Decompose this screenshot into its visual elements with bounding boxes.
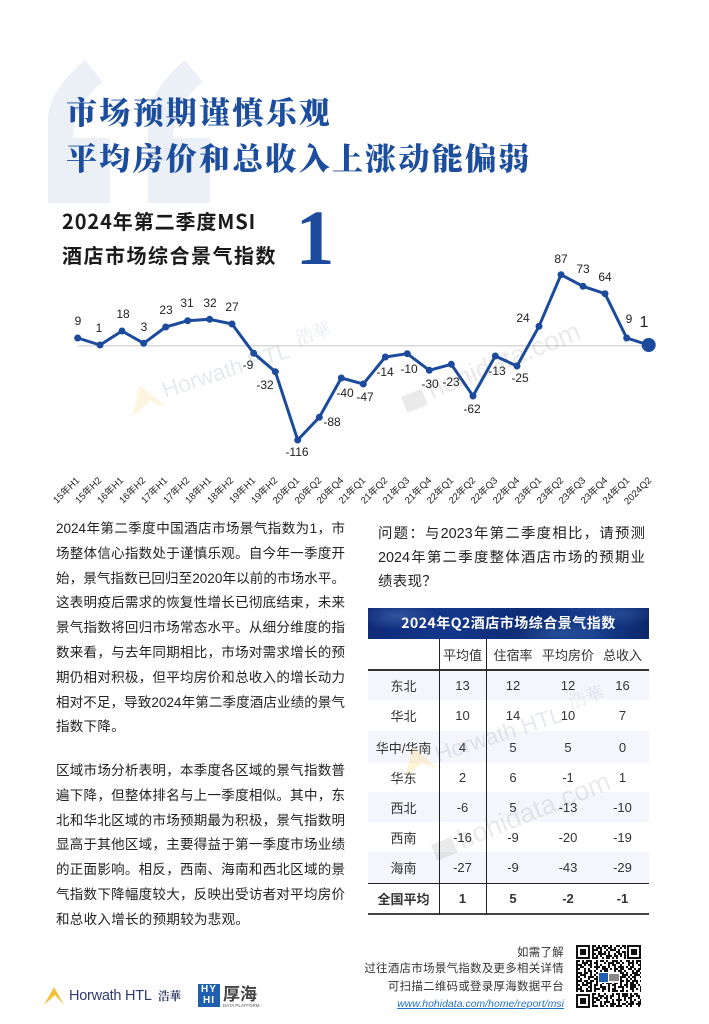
- line chart: MSI index history: -47: [356, 390, 374, 404]
- data table: regional index: -29: [613, 860, 632, 875]
- data table: regional index: 平均值: [443, 648, 482, 663]
- data table: regional index: -20: [559, 830, 577, 844]
- line chart: MSI index history: -9: [243, 358, 254, 372]
- data table: regional index: -1: [617, 891, 628, 906]
- data table: regional index: -10: [613, 800, 632, 814]
- footer call to action: 如需了解: [517, 947, 564, 959]
- title: 平均房价和总收入上涨动能偏弱: [66, 142, 532, 177]
- data table: regional index: 5: [509, 800, 517, 814]
- logo: HOHI data platform: HY: [201, 984, 217, 995]
- line chart: MSI index history: 20年Q1: [270, 475, 302, 507]
- line chart: MSI index history: 24: [516, 311, 530, 325]
- text block: national summary: 指数下降。: [56, 719, 125, 734]
- data table: regional index: 0: [619, 740, 626, 754]
- data table: regional index: 7: [619, 708, 626, 723]
- watermarks: 浩華: [292, 315, 334, 351]
- data table: regional index: 平均房价: [542, 648, 594, 663]
- data table: regional index: -43: [559, 860, 577, 875]
- text block: regional analysis: 的正面影响。相反，西南、海南和西北区域的景: [56, 862, 345, 877]
- line chart: MSI index history: 18年H2: [205, 475, 236, 506]
- title: 市场预期谨慎乐观: [66, 96, 332, 131]
- data table: regional index: 西南: [390, 830, 416, 846]
- text block: national summary: 这表明疫后需求的恢复性增长已彻底结束，未来: [56, 595, 345, 610]
- watermarks: hohidata.com: [423, 316, 585, 405]
- text block: national summary: 2024年第二季度中国酒店市场景气指数为1，市: [56, 521, 345, 536]
- data table: regional index: 东北: [390, 678, 416, 694]
- line chart: MSI index history: 22年Q4: [490, 474, 523, 507]
- line chart: MSI index history: 22年Q3: [468, 475, 500, 507]
- data table: regional index: 海南: [390, 861, 416, 876]
- data table: regional index: -19: [613, 830, 632, 844]
- line chart: MSI index history: 18: [116, 307, 130, 321]
- footer call to action: 可扫描二维码或登录厚海数据平台: [388, 981, 564, 993]
- line chart: MSI index history: -14: [376, 365, 394, 379]
- survey question: [378, 526, 645, 590]
- line chart: MSI index history: -116: [285, 445, 309, 459]
- text block: national summary: 期仍相对积极，但平均房价和总收入的增长动力: [56, 670, 345, 685]
- text block: regional analysis: 北和华北区域的市场预期最为积极，景气指数明: [56, 813, 345, 828]
- line chart: MSI index history: 73: [576, 262, 590, 276]
- line chart: MSI index history: 32: [203, 296, 217, 310]
- line chart: MSI index history: -30: [421, 377, 439, 391]
- data table: regional index: 1: [459, 891, 466, 906]
- data table: regional index: -16: [453, 830, 472, 844]
- text block: national summary: 相对不足，导致2024年第二季度酒店业绩的景气: [56, 695, 345, 710]
- data table: regional index: 2: [459, 770, 466, 785]
- data table: regional index: 5: [509, 891, 517, 906]
- line chart: MSI index history: 87: [554, 252, 568, 266]
- data table: regional index: 华北: [390, 709, 416, 724]
- subtitle: MSI index name: [62, 206, 277, 269]
- line chart: MSI index history: 9: [75, 314, 82, 328]
- line chart: MSI index history: -32: [256, 378, 274, 392]
- logo: Horwath HTL: Horwath HTL: [69, 988, 152, 1004]
- line chart: MSI index history: -25: [511, 371, 529, 385]
- data table: regional index: 西北: [390, 800, 416, 816]
- data table: regional index: -27: [453, 860, 472, 875]
- line chart: MSI index history: [51, 252, 656, 507]
- line chart: MSI index history: -62: [463, 402, 481, 416]
- line chart: MSI index history: 9: [626, 312, 633, 326]
- watermarks: 浩華: [565, 679, 607, 715]
- data table: regional index: 12: [561, 678, 575, 692]
- logo: HOHI data platform: DATA PLATFORM: [223, 1003, 260, 1008]
- line chart: MSI index history: 21年Q2: [358, 475, 390, 507]
- logo: HOHI data platform: HI: [203, 995, 215, 1006]
- line chart: MSI index history: 1: [640, 314, 649, 331]
- data table: regional index: -13: [559, 800, 577, 814]
- line chart: MSI index history: 23: [159, 303, 173, 317]
- logo: HOHI data platform: [198, 980, 260, 1008]
- footer call to action: www.hohidata.com/home/report/msi: [397, 999, 564, 1010]
- data table: regional index: 12: [506, 678, 520, 692]
- line chart: MSI index history: 31: [180, 296, 194, 310]
- data table: regional index: 10: [455, 708, 470, 723]
- data table: regional index: 10: [561, 708, 575, 723]
- data table: regional index: 4: [459, 740, 466, 754]
- text block: regional analysis: 和总收入增长的预期较为悲观。: [56, 912, 249, 927]
- line chart: MSI index history: 21年Q3: [380, 475, 412, 507]
- table header banner: 2024年Q2酒店市场综合景气指数: [401, 613, 616, 633]
- line chart: MSI index history: 15年H2: [73, 475, 104, 506]
- text block: regional analysis: 遍下降，但整体排名与上一季度相似。其中，东: [56, 788, 345, 803]
- line chart: MSI index history: 19年H2: [249, 475, 280, 506]
- line chart: MSI index history: 17年H1: [139, 475, 170, 506]
- text block: national summary: [56, 521, 345, 734]
- data table: regional index: 5: [509, 740, 517, 754]
- data table: regional index: -1: [562, 770, 574, 785]
- line chart: MSI index history: 21年Q1: [336, 475, 368, 507]
- line chart: MSI index history: 22年Q2: [446, 475, 478, 507]
- line chart: MSI index history: 21年Q4: [402, 474, 435, 507]
- line chart: MSI index history: 15年H1: [51, 475, 82, 506]
- data table: regional index: 13: [455, 678, 470, 692]
- line chart: MSI index history: 20年Q2: [292, 475, 324, 507]
- data table: regional index: -6: [457, 800, 468, 814]
- line chart: MSI index history: -40: [336, 386, 354, 400]
- line chart: MSI index history: 17年H2: [161, 475, 192, 506]
- data table: regional index: 16: [615, 678, 630, 692]
- line chart: MSI index history: 16年H2: [117, 475, 148, 506]
- line chart: MSI index history: 2024Q2: [622, 475, 654, 507]
- watermarks: hohidata.com: [453, 766, 615, 855]
- data table: regional index: 华东: [390, 771, 416, 786]
- line chart: MSI index history: 16年H1: [95, 475, 126, 506]
- data table: regional index: 6: [509, 770, 517, 785]
- data table: regional index: 住宿率: [493, 648, 532, 663]
- text block: national summary: 始，景气指数已回归至2020年以前的市场水平。: [56, 571, 345, 586]
- subtitle: MSI index name: 2024年第二季度MSI: [62, 206, 256, 235]
- line chart: MSI index history: 22年Q1: [424, 475, 456, 507]
- survey question: 绩表现？: [378, 574, 437, 590]
- watermarks: Horwath HTL: [159, 338, 293, 403]
- data table: regional index: [368, 639, 649, 915]
- logo: Horwath HTL: [44, 987, 181, 1005]
- icon: QR code: [576, 945, 641, 1008]
- data table: regional index: 5: [564, 740, 572, 754]
- watermarks: Horwath HTL: [432, 702, 566, 767]
- line chart: MSI index history: -23: [442, 375, 460, 389]
- text block: national summary: 场整体信心指数处于谨慎乐观。自今年一季度开: [56, 546, 345, 561]
- line chart: MSI index history: 18年H1: [183, 475, 214, 506]
- line chart: MSI index history: 23年Q1: [512, 475, 544, 507]
- logo: HOHI data platform: 厚海: [223, 980, 257, 1005]
- text block: regional analysis: [56, 763, 345, 927]
- line chart: MSI index history: 24年Q1: [600, 475, 632, 507]
- decorative quotation mark: [48, 60, 210, 203]
- data table: regional index: 总收入: [603, 648, 642, 663]
- text block: regional analysis: 区域市场分析表明，本季度各区域的景气指数普: [56, 763, 345, 778]
- line chart: MSI index history: 3: [141, 320, 148, 334]
- footer call to action: [364, 946, 564, 1010]
- line chart: MSI index history: 23年Q2: [534, 475, 566, 507]
- line chart: MSI index history: 23年Q4: [578, 474, 611, 507]
- title: [66, 96, 532, 177]
- data table: regional index: -9: [507, 830, 519, 844]
- line chart: MSI index history: -13: [488, 364, 506, 378]
- data table: regional index: 1: [619, 770, 626, 785]
- line chart: MSI index history: 27: [225, 300, 239, 314]
- text block: national summary: 数来看，与去年同期相比，市场对需求增长的预: [56, 645, 345, 660]
- line chart: MSI index history: 20年Q4: [314, 474, 347, 507]
- logo: Horwath HTL: 浩華: [158, 988, 181, 1004]
- survey question: 问题：与2023年第二季度相比，请预测: [378, 526, 645, 542]
- data table: regional index: 华中/华南: [376, 740, 431, 756]
- survey question: 2024年第二季度整体酒店市场的预期业: [378, 550, 645, 566]
- data table: regional index: -9: [507, 860, 519, 875]
- line chart: MSI index history: 64: [598, 270, 612, 284]
- subtitle: MSI index name: 酒店市场综合景气指数: [62, 240, 277, 269]
- headline index value: 1: [296, 194, 334, 281]
- text block: regional analysis: 显高于其他区域，主要得益于第一季度市场业绩: [56, 837, 345, 852]
- line chart: MSI index history: -88: [323, 415, 341, 429]
- line chart: MSI index history: -10: [400, 362, 418, 376]
- text block: regional analysis: 气指数下降幅度较大，反映出受访者对平均房价: [56, 887, 345, 902]
- table header banner: [368, 608, 649, 639]
- data table: regional index: 全国平均: [377, 892, 430, 907]
- text block: national summary: 景气指数将回归市场常态水平。从细分维度的指: [56, 620, 345, 635]
- data table: regional index: 14: [506, 708, 520, 723]
- footer call to action: 过往酒店市场景气指数及更多相关详情: [364, 963, 564, 975]
- line chart: MSI index history: 1: [96, 321, 103, 335]
- line chart: MSI index history: 19年H1: [227, 475, 258, 506]
- data table: regional index: -2: [562, 891, 574, 906]
- line chart: MSI index history: 23年Q3: [556, 475, 588, 507]
